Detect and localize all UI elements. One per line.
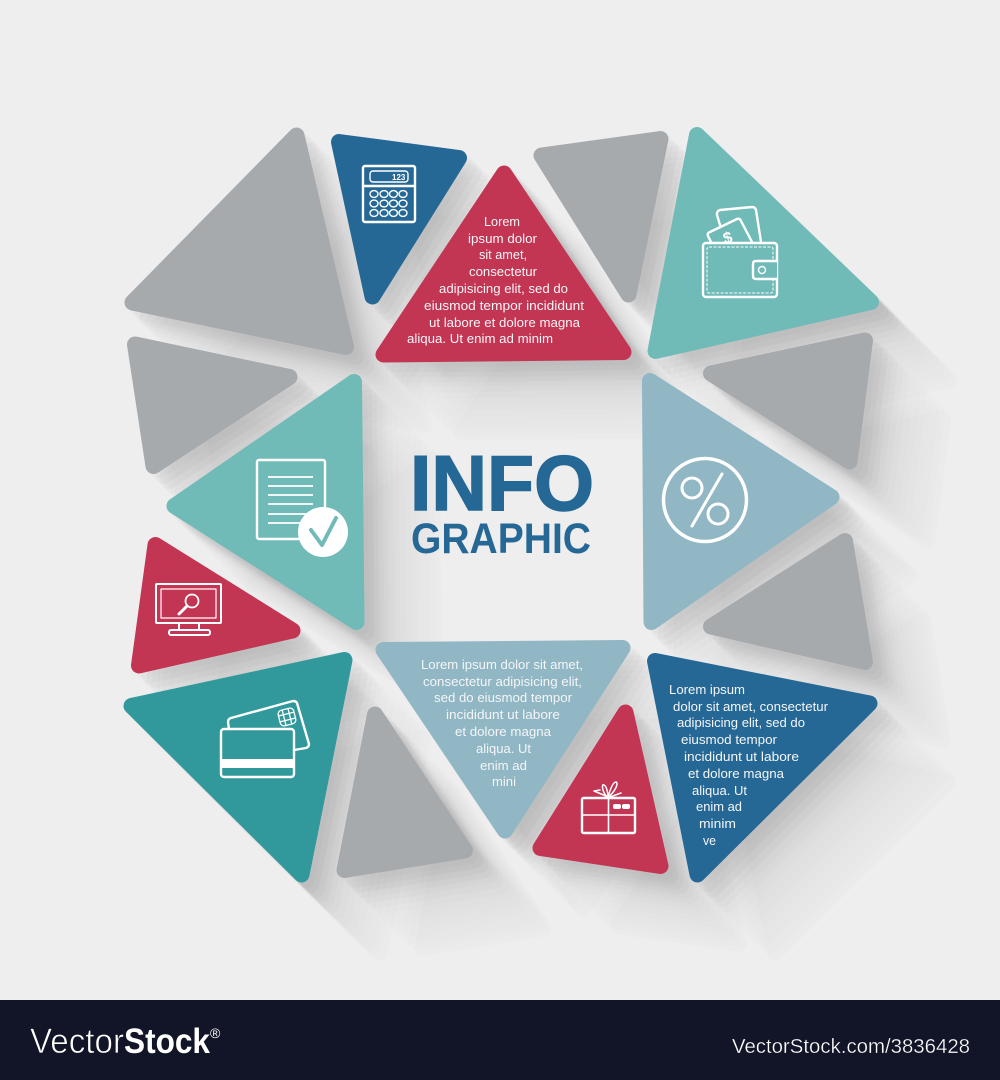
text block: right lorem: dolor sit amet, consectetur: [673, 699, 829, 714]
text block: bottom lorem: enim ad: [480, 758, 527, 773]
icon: monitor with magnifier: [156, 584, 221, 635]
text block: bottom lorem: et dolore magna: [455, 724, 552, 739]
icon: credit cards: [221, 701, 309, 777]
footer logo: VectorStock: [30, 1022, 219, 1061]
panel: gray triangle top: [542, 139, 660, 294]
panel: gray triangle right lower: [711, 541, 865, 662]
footer id: VectorStock.com/3836428: [732, 1036, 970, 1058]
text block: right lorem: enim ad: [696, 799, 742, 814]
text block: top lorem: Lorem: [484, 214, 520, 229]
text block: right lorem: ve: [703, 833, 716, 848]
footer logo: ®: [210, 1025, 221, 1041]
text block: right lorem: incididunt ut labore: [684, 749, 799, 764]
text block: bottom lorem: incididunt ut labore: [446, 707, 560, 722]
text block: top lorem: sit amet,: [479, 247, 527, 262]
panel: credit card triangle: [132, 660, 344, 874]
icon: wallet: [703, 207, 777, 297]
text block: bottom lorem: mini: [492, 774, 516, 789]
icon: wallet: $: [721, 229, 734, 248]
panel: calculator triangle: [339, 142, 459, 296]
text block: top lorem: adipisicing elit, sed do: [439, 281, 568, 296]
text block: top lorem: [407, 214, 584, 346]
text block: top lorem: ipsum dolor: [468, 231, 538, 246]
text block: right lorem: eiusmod tempor: [681, 732, 778, 747]
text block: bottom lorem: sed do eiusmod tempor: [434, 690, 573, 705]
icon: calculator: 123: [392, 173, 406, 182]
text block: bottom lorem: aliqua. Ut: [476, 741, 531, 756]
panel: monitor triangle: [139, 545, 292, 666]
panel: wallet triangle: [656, 135, 871, 351]
title: GRAPHIC: [411, 515, 591, 563]
panel: gray triangle left: [135, 344, 290, 466]
text block: right lorem: et dolore magna: [688, 766, 785, 781]
icon: calculator: [363, 166, 415, 222]
panel: document triangle: [174, 382, 356, 622]
text block: top lorem: eiusmod tempor incididunt: [424, 298, 584, 313]
panel: percent triangle: [650, 381, 832, 622]
text block: bottom lorem: [421, 657, 583, 789]
panel: gray triangle bottom: [344, 714, 465, 870]
panel: crimson text triangle top: [384, 174, 624, 354]
text block: top lorem: aliqua. Ut enim ad minim: [407, 331, 553, 346]
long shadows: [136, 140, 949, 952]
text block: right lorem: minim: [699, 816, 736, 831]
panel: gray triangle top left: [132, 136, 346, 347]
text block: right lorem: adipisicing elit, sed do: [677, 715, 805, 730]
footer bar: [0, 1000, 1000, 1080]
text block: right lorem: Lorem ipsum: [669, 682, 745, 697]
panel: blue text triangle: [655, 661, 870, 874]
text block: top lorem: ut labore et dolore magna: [429, 315, 581, 330]
text block: right lorem: aliqua. Ut: [692, 783, 747, 798]
icon: percent: [664, 458, 746, 542]
icon: gift: [582, 782, 635, 833]
panel: light blue text triangle: [384, 648, 622, 830]
panel: gray triangle right upper: [711, 340, 865, 462]
title: INFO: [410, 439, 594, 527]
text block: bottom lorem: consectetur adipisicing elit,: [423, 674, 582, 689]
text block: right lorem: [669, 682, 829, 848]
icon: document with check: [257, 460, 348, 557]
panel: gift triangle: [540, 712, 660, 866]
text block: top lorem: consectetur: [469, 264, 538, 279]
text block: bottom lorem: Lorem ipsum dolor sit amet,: [421, 657, 583, 672]
